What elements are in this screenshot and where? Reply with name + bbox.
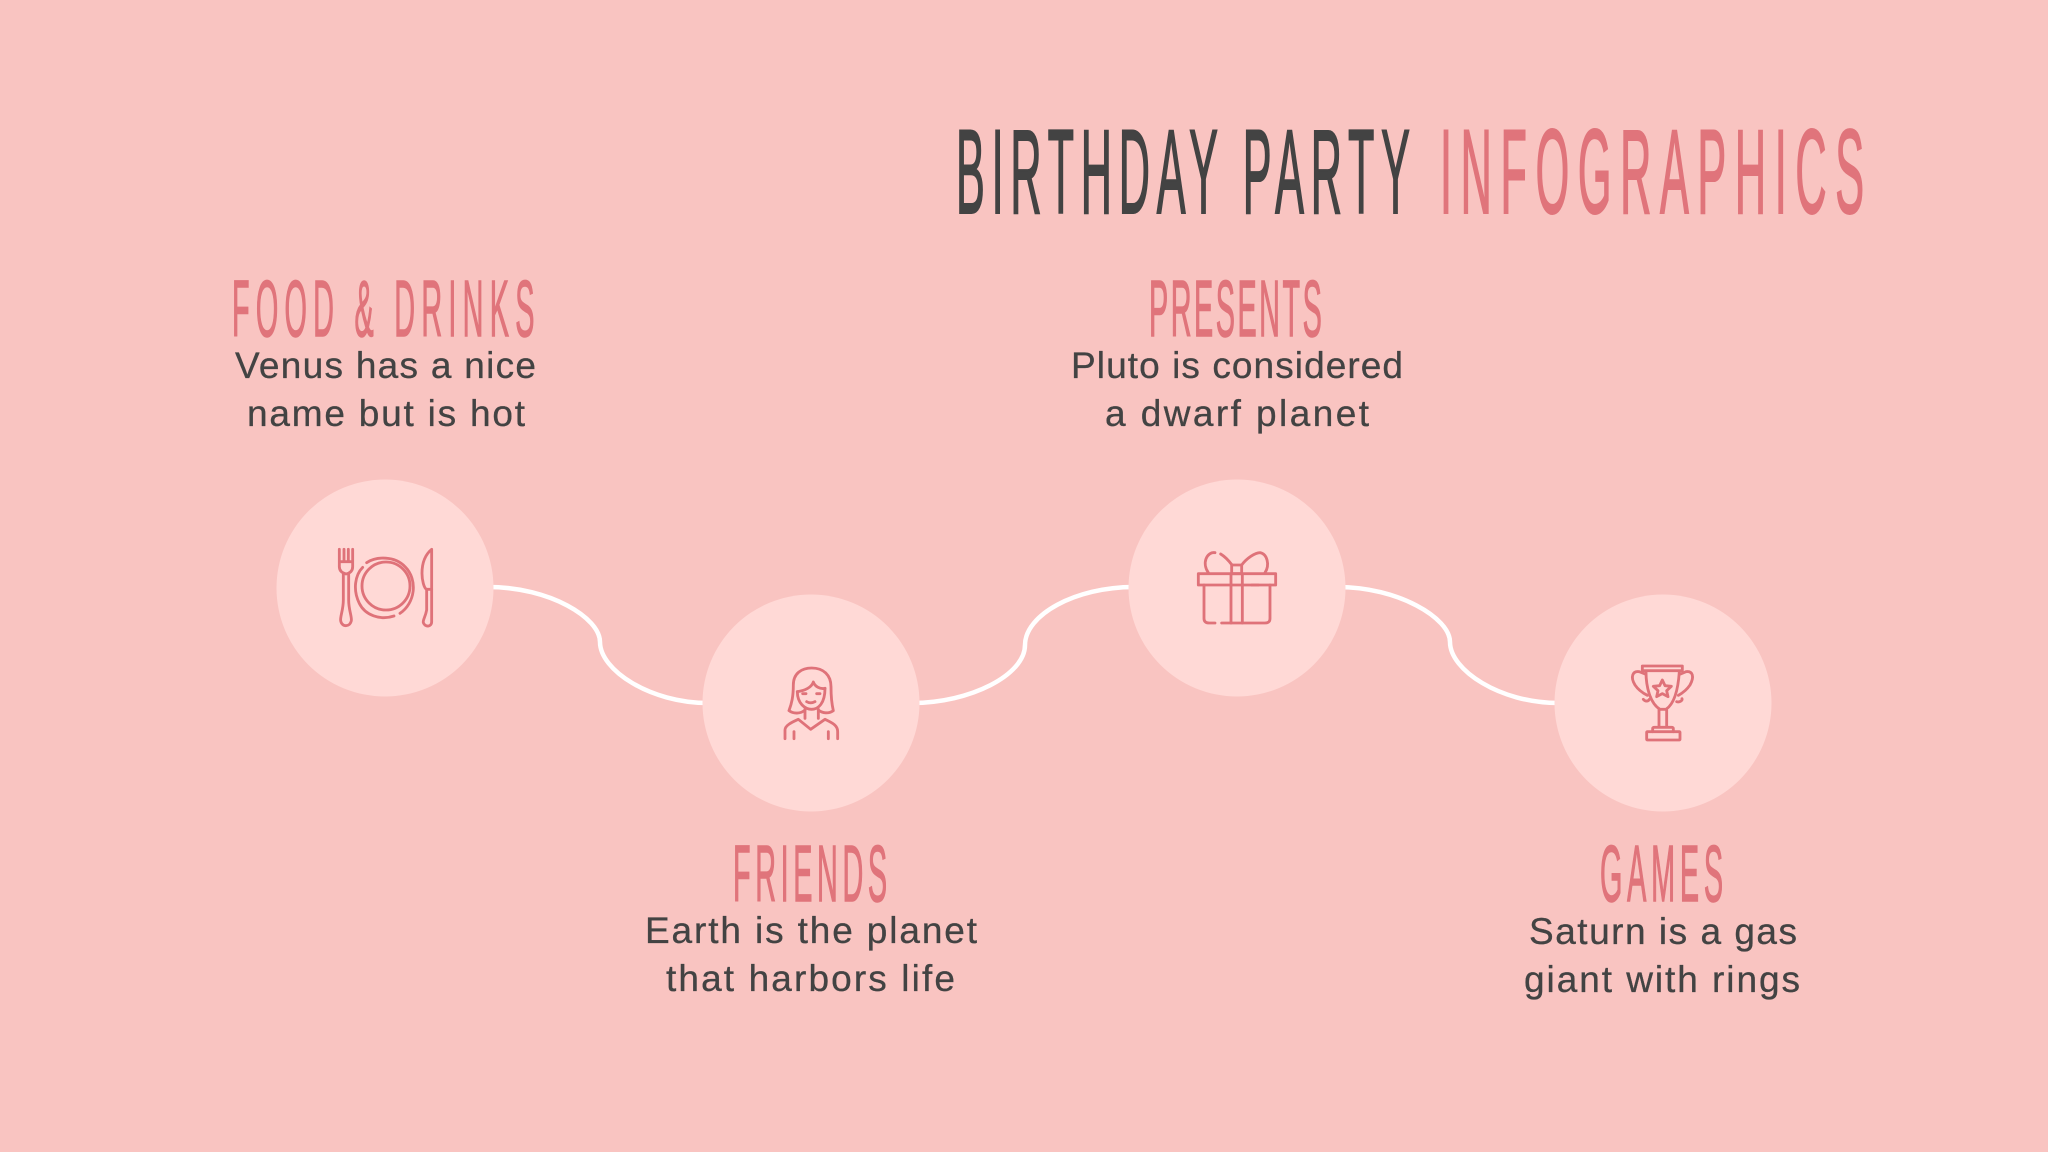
title: INFOGRAPHICS xyxy=(1440,105,1864,240)
circle: presents xyxy=(1128,480,1346,696)
circle: food and drinks xyxy=(276,480,494,696)
heading: games: GAMES xyxy=(1600,829,1723,918)
text: friends description: that harbors life xyxy=(666,958,955,999)
text: presents description xyxy=(1071,345,1403,434)
panel: friends xyxy=(645,594,978,999)
text: food and drinks description: name but is hot xyxy=(247,393,526,434)
text: friends description: Earth is the planet xyxy=(645,910,978,951)
heading: food and drinks: FOOD & DRINKS xyxy=(232,264,534,353)
text: games description: giant with rings xyxy=(1524,959,1800,1000)
text: food and drinks description: Venus has a nice xyxy=(235,345,536,386)
text: food and drinks description xyxy=(235,345,536,434)
text: presents description: Pluto is considered xyxy=(1071,345,1403,386)
title xyxy=(956,105,1864,240)
text: games description xyxy=(1524,911,1800,1000)
icon: trophy xyxy=(1632,666,1693,740)
panel: games xyxy=(1524,594,1800,1000)
icon: plate and cutlery xyxy=(339,549,432,626)
text: friends description xyxy=(645,910,978,999)
heading: presents: PRESENTS xyxy=(1149,264,1322,353)
circle: friends xyxy=(702,594,920,812)
panel: presents xyxy=(1071,264,1403,696)
icon: gift box xyxy=(1198,553,1276,623)
connector lines xyxy=(488,587,1558,703)
title: BIRTHDAY PARTY xyxy=(956,105,1410,240)
panel: food and drinks xyxy=(232,264,536,696)
icon: person xyxy=(785,668,838,739)
text: games description: Saturn is a gas xyxy=(1529,911,1797,952)
text: presents description: a dwarf planet xyxy=(1105,393,1370,434)
circle: games xyxy=(1554,594,1772,812)
heading: friends: FRIENDS xyxy=(733,829,887,918)
